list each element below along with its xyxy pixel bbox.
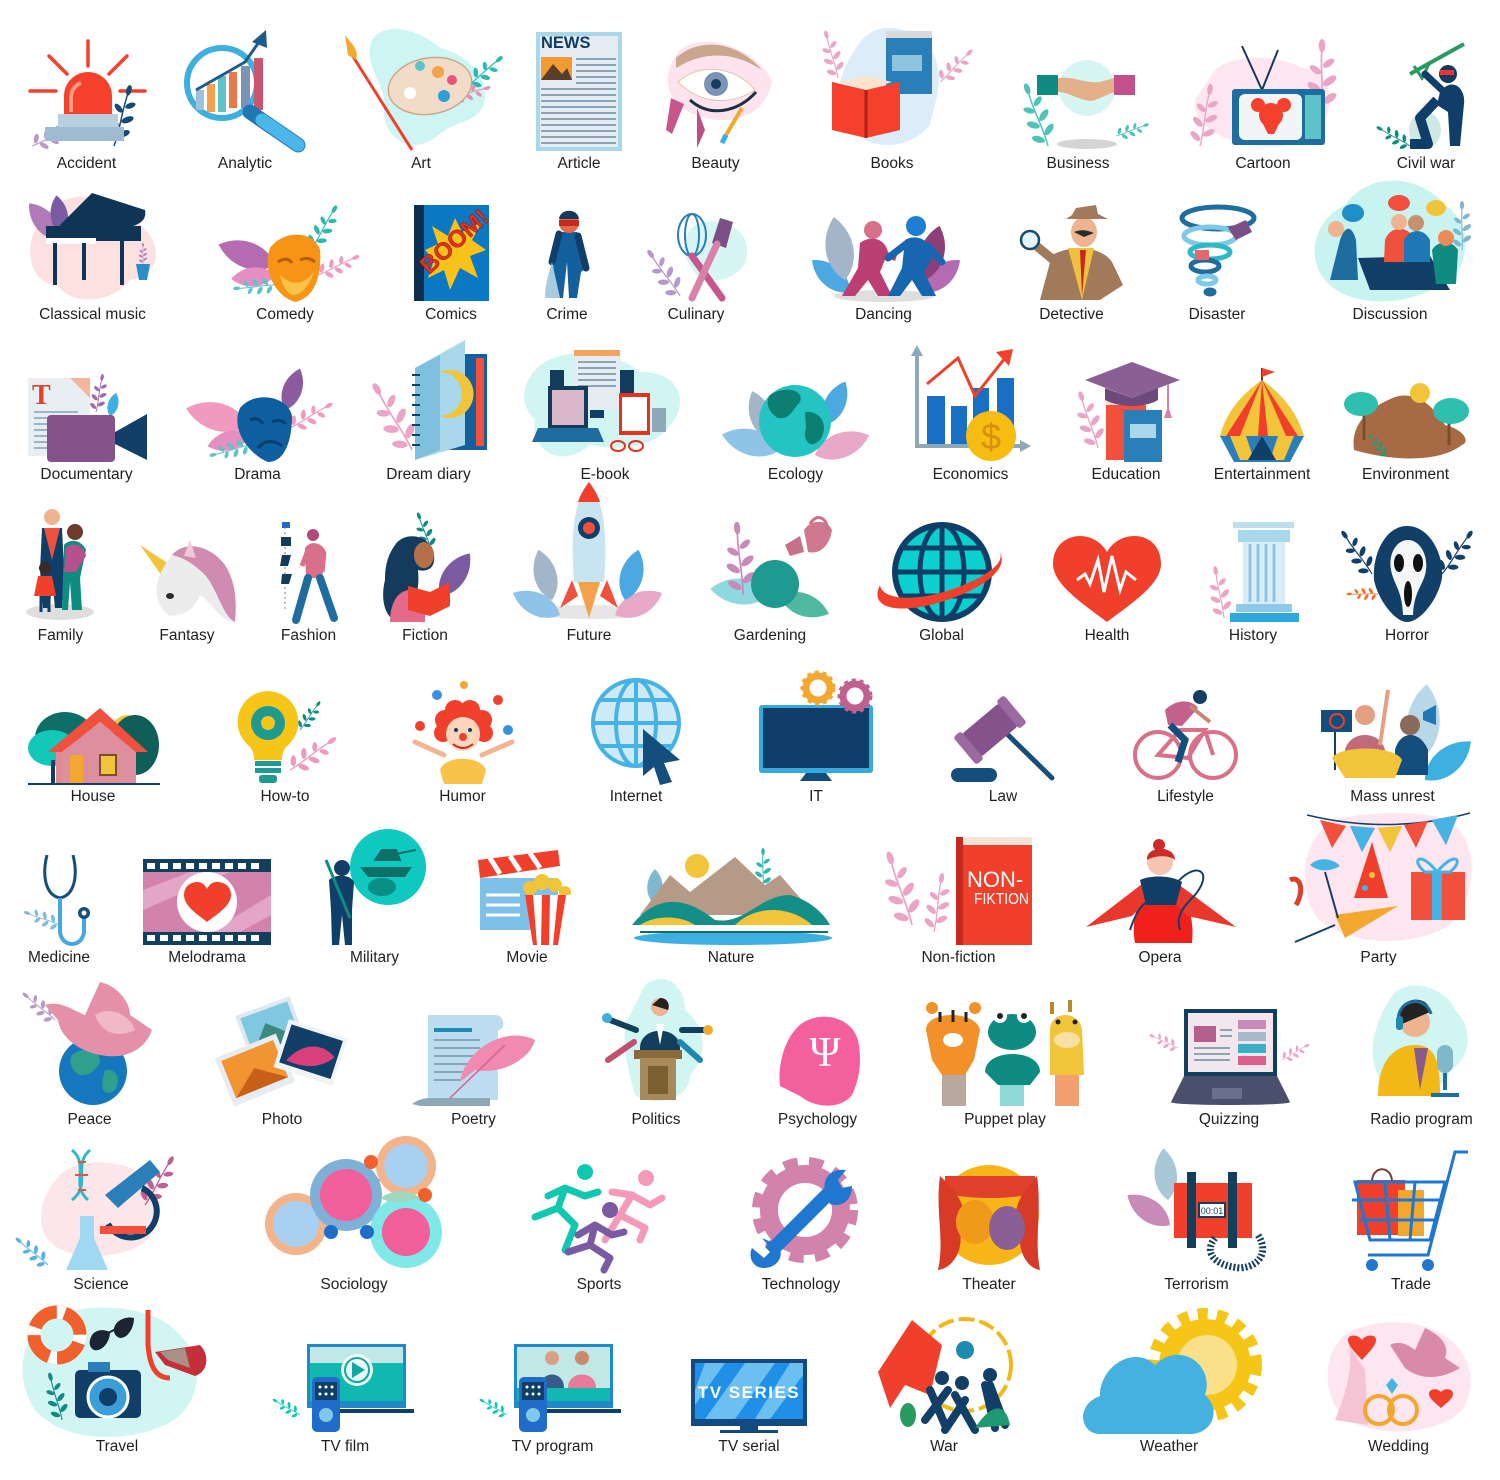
icon: book [873,837,1032,945]
label: Education [1092,466,1160,483]
item: Peace [17,982,152,1128]
item: Accident [28,41,145,172]
label: Theater [962,1276,1016,1293]
item: E-book [524,350,680,483]
item: Psychology [778,1017,860,1128]
icon: dove over globe [17,982,152,1105]
item: Horror [1333,525,1481,644]
icon: globe and cursor [593,680,680,785]
label: Mass unrest [1350,788,1435,805]
icon: shopping cart [1352,1152,1468,1271]
item: Health [1053,536,1161,644]
label: Horror [1385,627,1429,644]
icon: film camera and script: T [32,380,51,411]
icon: dna, microscope and flask [10,1150,183,1272]
label: Civil war [1397,155,1455,172]
icon: juggling clown [415,681,513,784]
label: Comics [425,306,477,323]
label: Detective [1039,306,1104,323]
icon: dove, rings and hearts [1328,1322,1471,1431]
item: Environment [1344,383,1469,483]
item: Detective [1021,205,1123,323]
icon: whisk and spatula [638,214,747,303]
item: Beauty [666,42,772,172]
icon: books [815,28,979,145]
icon: meeting [1315,181,1472,301]
item: Classical music [21,193,156,323]
icon: unicorn [140,540,236,622]
icon: gavel [951,695,1052,782]
label: Sports [577,1276,622,1293]
item: Lifestyle [1135,690,1236,805]
icon: growth chart and coin: $ [981,416,1001,457]
label: Culinary [668,306,725,323]
label: Terrorism [1164,1276,1229,1293]
icon: film strip with heart [143,859,271,945]
icon: time bomb [1121,1147,1263,1268]
item: Cartoon [1187,39,1338,172]
item: Puppet play [926,1000,1084,1128]
icon: comic book: BOOM! [415,204,494,279]
icon: siren [28,41,145,155]
label: Science [73,1276,129,1293]
label: Medicine [28,949,90,966]
item: Opera [1086,839,1236,966]
label: Cartoon [1235,155,1291,172]
icon: rocks and trees [1344,383,1469,460]
label: Environment [1362,466,1450,483]
icon: globe with orbit [877,525,1002,619]
item: War [878,1319,1011,1455]
icon: detective [1021,205,1123,300]
label: Wedding [1368,1438,1429,1455]
label: Poetry [451,1111,496,1128]
item: Culinary [638,214,747,323]
label: Books [870,155,914,172]
label: E-book [580,466,630,483]
label: Weather [1140,1438,1198,1455]
label: Non-fiction [921,949,996,966]
label: Documentary [40,466,133,483]
label: Travel [96,1438,138,1455]
icon: handshake [1012,60,1151,151]
icon: dancers [805,215,967,302]
icon: family [26,509,94,620]
icon: sad mask [183,365,338,464]
item: Dream diary [360,340,487,483]
item: Non-fiction [873,837,1032,966]
icon: monitor with presenters [476,1344,621,1432]
item: Education [1068,362,1180,483]
label: Gardening [734,627,806,644]
item: Dancing [805,215,967,323]
item: TV serial [691,1359,807,1455]
icon: stethoscope [21,855,90,944]
icon: party items [1290,813,1471,942]
icon: rocket [508,482,667,625]
label: Ecology [768,466,823,483]
label: Military [350,949,399,966]
label: Crime [546,306,588,323]
item: Disaster [1182,207,1254,323]
icon: monitor and gears [759,672,873,781]
item: IT [759,672,873,805]
icon: head with psi: Ψ [810,1030,840,1076]
label: Discussion [1353,306,1427,323]
icon: book: FIKTION [974,891,1029,908]
label: Comedy [256,306,314,323]
label: Article [557,155,601,172]
label: Party [1360,949,1397,966]
item: Comics [414,204,494,323]
item: Trade [1352,1152,1468,1293]
label: Classical music [39,306,146,323]
item: History [1204,522,1299,644]
label: Sociology [320,1276,388,1293]
item: Art [345,29,509,172]
icon: model with hangers [280,522,334,620]
item: Drama [183,365,338,483]
icon: sun and cloud [1083,1315,1255,1434]
item: Military [326,829,426,966]
label: Health [1085,627,1129,644]
item: Party [1290,813,1471,966]
icon: ghost mask [1333,525,1481,622]
item: Nature [632,848,832,966]
item: Internet [593,680,680,805]
icon: magnifier with chart [187,30,298,145]
icon: book: NON- [967,867,1023,892]
icon: house with trees [28,708,160,785]
icon: scroll and quill [412,1015,535,1106]
item: Sociology [265,1136,442,1293]
item: Poetry [412,1015,535,1128]
icon: greek column [1204,522,1299,622]
icon: speaker at podium [602,979,713,1101]
label: Lifestyle [1157,788,1214,805]
item: Fantasy [140,540,236,644]
item: Humor [415,681,513,805]
label: Trade [1391,1276,1431,1293]
icon: gear and wrench [750,1163,852,1268]
icon: smiling mask [214,200,363,302]
label: War [930,1438,958,1455]
label: Quizzing [1199,1111,1259,1128]
item: Article [536,32,622,172]
item: Sports [535,1164,662,1293]
label: Family [38,627,84,644]
icon: woman reading [383,510,479,622]
label: Accident [57,155,117,172]
label: Fantasy [159,627,215,644]
label: Dream diary [386,466,471,483]
label: TV film [321,1438,369,1455]
item: Radio program [1370,985,1473,1128]
label: Dancing [855,306,912,323]
icon: tv set [1187,39,1338,148]
icon: landscape [632,848,832,945]
item: Wedding [1328,1322,1471,1455]
label: Analytic [218,155,272,172]
item: Photo [215,996,348,1128]
item: Family [26,509,94,644]
item: Civil war [1373,44,1464,172]
icon: travel items [23,1308,206,1437]
label: IT [809,788,823,805]
item: House [28,708,160,805]
item: Business [1012,60,1151,172]
item: TV film [269,1344,414,1455]
label: Psychology [778,1111,857,1128]
label: Politics [631,1111,681,1128]
label: Melodrama [168,949,246,966]
icon: monitor, remote and play [269,1344,414,1432]
icon: time bomb: 00:01 [1201,1206,1223,1216]
icon: masked thief [545,211,586,298]
label: Disaster [1189,306,1245,323]
label: Puppet play [964,1111,1046,1128]
item: Science [10,1150,183,1293]
item: Economics [911,345,1031,483]
label: Radio program [1370,1111,1473,1128]
item: Crime [545,211,588,323]
icon: circus tent [1220,368,1304,462]
item: Discussion [1315,181,1472,323]
icon: graduation cap and books [1068,362,1180,462]
label: Global [919,627,964,644]
label: History [1229,627,1277,644]
item: Entertainment [1214,368,1311,483]
label: Entertainment [1214,466,1311,483]
icon: clapperboard and popcorn [478,850,574,945]
item: Gardening [709,518,833,644]
item: Fiction [383,510,479,644]
label: Photo [262,1111,302,1128]
label: Beauty [691,155,740,172]
label: How-to [260,788,310,805]
item: Mass unrest [1321,683,1479,805]
icon: host and microphone [1373,985,1468,1096]
item: Ecology [719,377,873,483]
icon: hand puppets [926,1000,1084,1106]
icon: newspaper: NEWS [541,34,590,52]
label: Peace [68,1111,111,1128]
item: Terrorism [1121,1147,1263,1293]
label: Law [989,788,1018,805]
label: Technology [762,1276,840,1293]
item: Fashion [280,522,336,644]
item: Documentary [28,373,147,483]
icon: tornado [1182,207,1254,294]
icon: globe and leaves [719,377,873,467]
item: Technology [750,1163,852,1293]
item: Analytic [187,30,298,172]
item: Quizzing [1147,1009,1313,1128]
label: Drama [234,466,281,483]
icon: watering can and plant [709,518,833,624]
icon: photographs [215,996,348,1106]
label: Economics [933,466,1009,483]
icon: runners [535,1164,662,1270]
label: TV program [512,1438,593,1455]
label: Fiction [402,627,448,644]
icon: protesters [1321,683,1479,790]
item: Movie [478,850,574,966]
icon: light bulb with gear [238,691,343,783]
item: Politics [602,979,713,1128]
icon: tv series screen: TV SERIES [698,1383,800,1402]
label: Opera [1138,949,1182,966]
icon: cyclist [1135,690,1236,778]
item: Future [508,482,667,644]
icon: grand piano [21,193,156,299]
icon: soldiers and flag [878,1319,1011,1430]
label: Fashion [281,627,336,644]
label: Future [567,627,611,644]
icon: laptop, monitor and devices [524,350,680,456]
label: Movie [506,949,548,966]
item: Weather [1083,1315,1255,1455]
icon: opera singer [1086,839,1236,943]
item: Comedy [214,200,363,323]
item: Medicine [21,855,90,966]
item: How-to [238,691,343,805]
label: House [71,788,115,805]
icon: eye and cosmetics [666,42,772,148]
item: Travel [23,1308,206,1455]
icon: curtains and masks [938,1165,1040,1270]
item: Global [877,525,1002,644]
item: Melodrama [143,859,271,966]
icon: notebook and moon [360,340,487,460]
item: Books [815,28,979,172]
icon: laptop with quiz [1147,1009,1313,1105]
label: Art [411,155,432,172]
item: Theater [938,1165,1040,1293]
label: Nature [708,949,754,966]
item: Law [951,695,1052,805]
icon: soldier with tank [326,829,426,945]
icon: connected heads [265,1136,442,1268]
label: Humor [439,788,486,805]
label: Business [1047,155,1110,172]
label: Internet [610,788,663,805]
icon: heart with pulse [1053,536,1161,622]
item: TV program [476,1344,621,1455]
label: TV serial [718,1438,780,1455]
icon: soldier with rifle [1373,44,1464,153]
icon: palette and brush [345,29,509,150]
